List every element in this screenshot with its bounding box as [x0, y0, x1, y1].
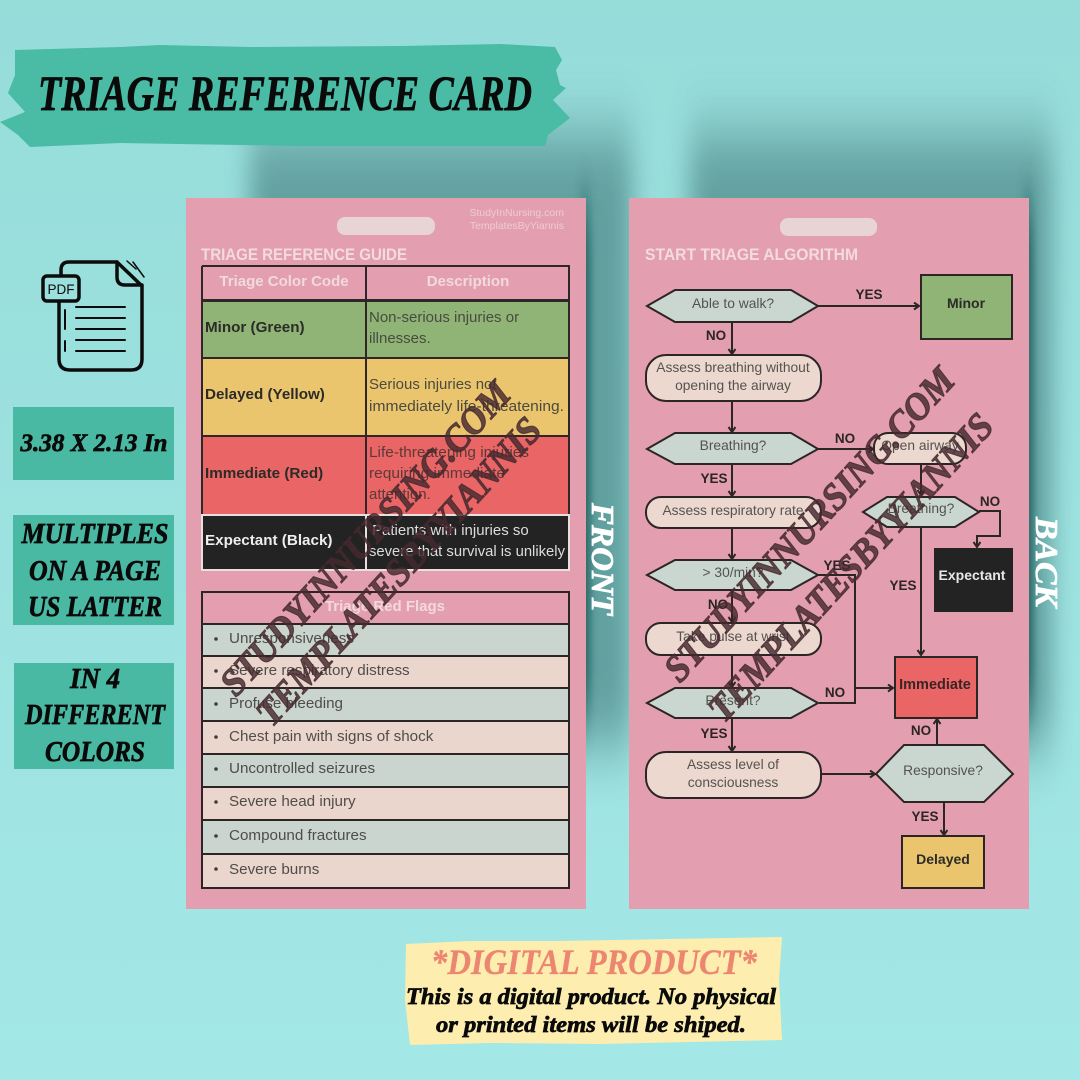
decision: responsive: Responsive? [903, 763, 983, 778]
flow labels [700, 287, 1000, 824]
outcome: expectant [934, 548, 1013, 612]
icon label: PDF: PDF [48, 282, 74, 297]
side label: front: FRONT [585, 502, 621, 617]
decision: breathing second: Breathing? [888, 501, 955, 516]
step: open airway [874, 433, 966, 464]
decision: respiratory rate [647, 560, 818, 590]
colors badge: COLORS [45, 736, 145, 768]
flow labels: YES [700, 471, 728, 486]
decision: able to walk: Able to walk? [692, 296, 774, 311]
flow labels: YES [911, 809, 939, 824]
panel: back card [629, 198, 1029, 909]
step: assess consciousness: Assess level of [687, 757, 779, 772]
outcome: immediate: Immediate [899, 677, 971, 693]
watermark: front card: STUDYINNURSING.COM [212, 373, 520, 704]
triage color table: Immediate (Red) [205, 465, 323, 482]
decision: pulse present: Present? [705, 693, 761, 708]
outcome: minor [921, 275, 1012, 339]
triage color table: severe that survival is unlikely [369, 543, 565, 560]
triage color table: Serious injuries not [369, 376, 497, 393]
outcome: delayed [902, 836, 984, 888]
flow labels: NO [708, 597, 728, 612]
size badge [13, 407, 174, 480]
outcome: delayed: Delayed [916, 851, 970, 867]
watermark: back card: TEMPLATESBYYIANNIS [700, 405, 1002, 730]
card slot [337, 217, 435, 235]
step: assess breathing: Assess breathing without [656, 360, 810, 375]
step: open airway: Open airway [881, 438, 959, 453]
watermark: back card: STUDYINNURSING.COM [656, 359, 964, 690]
red flags table: Uncontrolled seizures [229, 760, 375, 777]
triage color table: attention. [369, 486, 431, 503]
decision: breathing [647, 433, 818, 464]
decision: pulse present [647, 688, 818, 718]
flow labels: YES [823, 558, 851, 573]
triage color table: Description [427, 273, 509, 290]
flow labels: YES [855, 287, 883, 302]
step: assess consciousness: consciousness [688, 775, 778, 790]
step: assess respiratory rate: Assess respiratory rate [662, 503, 804, 518]
triage color table: Minor (Green) [205, 319, 305, 336]
colors badge [14, 663, 174, 769]
red flags table: Profuse bleeding [229, 695, 343, 712]
layout badge: MULTIPLES [21, 518, 168, 550]
outcome: minor: Minor [947, 295, 986, 311]
decision: able to walk [647, 290, 818, 322]
step: take pulse [646, 623, 821, 655]
step: assess breathing: opening the airway [675, 378, 791, 393]
triage color table [202, 266, 569, 570]
triage color table: Non-serious injuries or [369, 309, 519, 326]
flow labels: YES [889, 578, 917, 593]
watermark credits: StudyInNursing.com [469, 207, 564, 219]
callout: digital product: *DIGITAL PRODUCT* [431, 942, 758, 982]
layout badge: US LATTER [28, 591, 162, 623]
decision: breathing second [863, 497, 979, 527]
red flags table: Compound fractures [229, 827, 367, 844]
decision: breathing: Breathing? [700, 438, 767, 453]
watermark credits: TemplatesByYiannis [470, 220, 564, 232]
step: assess respiratory rate [646, 497, 821, 528]
title banner [0, 44, 570, 147]
red flags table: Severe respiratory distress [229, 662, 410, 679]
icon: PDF document [43, 261, 144, 370]
colors badge: DIFFERENT [24, 699, 166, 731]
flow labels: NO [835, 431, 855, 446]
colors badge: IN 4 [69, 663, 120, 695]
outcome: immediate [895, 657, 977, 718]
callout: digital product [405, 937, 782, 1045]
red flags table: Severe burns [229, 861, 320, 878]
red flags table: Unresponsiveness [229, 630, 354, 647]
triage color table: Patients with injuries so [372, 522, 529, 539]
flowchart [646, 275, 1013, 888]
red flags table [202, 592, 569, 888]
flow labels: NO [706, 328, 726, 343]
step: assess breathing [646, 355, 821, 401]
flow labels: NO [911, 723, 931, 738]
decision: respiratory rate: > 30/min? [703, 565, 764, 580]
triage color table: illnesses. [369, 330, 431, 347]
flow labels: NO [825, 685, 845, 700]
triage color table: Delayed (Yellow) [205, 386, 325, 403]
triage color table: Life-threatening injuries [369, 444, 529, 461]
triage color table: Expectant (Black) [205, 532, 332, 549]
triage color table: immediately life-threatening. [369, 398, 564, 415]
side label: back: BACK [1029, 516, 1065, 610]
panel: front card [186, 198, 586, 909]
heading: TRIAGE REFERENCE GUIDE [201, 246, 407, 264]
red flags table: Chest pain with signs of shock [229, 728, 434, 745]
outcome: expectant: Expectant [939, 567, 1006, 583]
size badge: 3.38 X 2.13 In [19, 430, 168, 457]
triage color table: Triage Color Code [219, 273, 349, 290]
title text: TRIAGE REFERENCE CARD [38, 65, 532, 121]
step: take pulse: Take pulse at wrist [676, 629, 790, 644]
watermark credits [469, 207, 564, 232]
triage color table: requiring immediate [369, 465, 505, 482]
decision: responsive [876, 745, 1013, 802]
step: assess consciousness [646, 752, 821, 798]
callout: digital product: or printed items will be shiped. [436, 1012, 746, 1037]
heading: START TRIAGE ALGORITHM [645, 246, 858, 264]
layout badge: ON A PAGE [29, 555, 161, 587]
red flags table: Severe head injury [229, 793, 356, 810]
layout badge [13, 515, 174, 625]
flow labels: NO [980, 494, 1000, 509]
red flags table: Triage Red Flags [325, 598, 445, 615]
callout: digital product: This is a digital product. No physical [406, 984, 777, 1009]
flow labels: YES [700, 726, 728, 741]
watermark: front card: TEMPLATESBYYIANNIS [248, 409, 550, 734]
card slot [780, 218, 877, 236]
